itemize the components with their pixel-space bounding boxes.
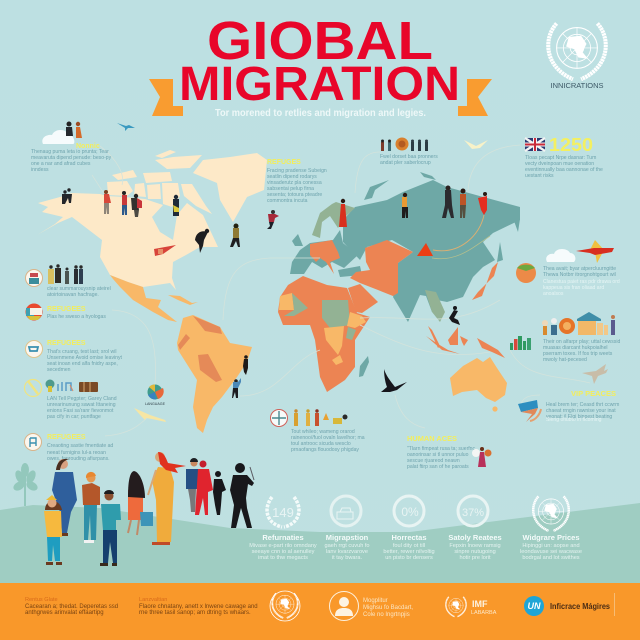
item 5: neeat furnigins lul-a reoan [47, 450, 106, 456]
stat zero percent ring: foul dity ot till [393, 543, 425, 549]
figures on cloud [66, 122, 82, 138]
world map [37, 150, 520, 433]
orange top figure [460, 188, 466, 218]
right text block 1: Thewa Notbrr itrorgnohtgourt wil [543, 272, 616, 278]
figure blue shirt [232, 378, 241, 398]
right text block 2: muasas diarcant hukpoialhel [543, 345, 608, 351]
footer text 1: Rentus Glate [25, 597, 58, 603]
pair [62, 188, 72, 204]
ribbon right [458, 79, 492, 116]
footer UN emblem [270, 591, 300, 621]
walker [230, 224, 240, 247]
North America [37, 150, 267, 290]
footer blue logo and name: Inficrace Mágires [550, 602, 611, 611]
girl from behind [128, 471, 145, 535]
map people north america [62, 188, 279, 256]
hill [0, 503, 640, 583]
text block top left: one a nar and afrad cubes [31, 161, 91, 167]
right text block 2: mwoly hat-pecesed [543, 357, 587, 363]
right text block 1: anoalsos [543, 291, 564, 297]
item 1: atoirtoinavan hacfrage. [47, 292, 99, 298]
group of people [48, 264, 83, 284]
right text block 1: Clanestua paiet ras pdr drawa ord [543, 279, 620, 285]
boy in teal shirt [100, 490, 121, 566]
woman in blue [52, 459, 77, 536]
title: MIGRATION [179, 58, 460, 111]
text block top left [31, 143, 112, 173]
left column items [24, 264, 123, 462]
right text block 2 [543, 339, 620, 363]
bird [381, 369, 407, 392]
Africa [278, 276, 370, 392]
stat 37 percent ring: hotir pre lorit [459, 555, 491, 561]
item 2: REFUGEES [47, 306, 86, 313]
vip peaces block: Sleng oflubto in flcoming [546, 417, 602, 423]
text block refuges: sabsentai pelup firna [267, 186, 314, 192]
stat 149: imat to thw megacts [258, 555, 308, 561]
flag [525, 138, 545, 151]
footer text 1 [25, 597, 118, 616]
Arabian Peninsula [348, 284, 378, 313]
lower center item: rainenoo//fuol ovaln lavelhor; ma [291, 435, 365, 441]
item 4: LAN Tell Pegpter; Garey Cland [47, 396, 117, 402]
yellow vest traveller [173, 195, 179, 216]
plane yellow [134, 408, 166, 422]
yellow top figure [402, 193, 408, 218]
cloud and travellers top left [42, 122, 82, 144]
item 4 [24, 380, 117, 420]
Southeast Asia orange [426, 262, 505, 358]
stat migration ring: Migrapstion [326, 533, 369, 542]
stat migration ring: gaeh rrgt cuvuh fo [324, 543, 370, 549]
text block refuges [267, 159, 327, 204]
stat UN emblem: Hipinggi un: aopse and [522, 543, 580, 549]
Scandinavia [312, 202, 355, 238]
globe ball [145, 384, 166, 406]
stat migration ring: lanv kvarzvarove [326, 549, 368, 555]
right side cloud and plane [546, 240, 614, 263]
item 2: Plas he sweso a hyologas [47, 314, 106, 320]
text block top left: Nonnic [76, 143, 100, 150]
text block refuges: vinsaderutz pla conessa [267, 180, 322, 186]
item 5 [24, 434, 113, 462]
vip peaces block: veonat; il Elgi binpest beating [546, 414, 612, 420]
stat 149 [249, 497, 317, 561]
right infographic icons [542, 312, 615, 335]
runner [267, 210, 279, 229]
footer IMF logo [446, 597, 497, 617]
stat zero percent ring: better, rewer nilvoltig [383, 549, 435, 555]
stat 37 percent ring: Satoly Reatees [448, 533, 502, 542]
text block refuges: REFUGES [267, 159, 301, 166]
lower center item [270, 409, 365, 453]
human rights block [407, 436, 476, 470]
footer text 2: Flaore chnatany, anett x lnwene cawage and [139, 604, 258, 610]
stat UN emblem [520, 496, 582, 561]
plane beige [582, 364, 608, 384]
text block refuges: Fracing pradense Subeign [267, 168, 327, 174]
text block refuges: sesenta; totoura pteadre [267, 192, 322, 198]
statistic 1250: vecty dveinpoan mue oenation [525, 161, 594, 167]
stat UN emblem: Widgrare Prices [522, 533, 580, 542]
vip peaces block: Heal brem ter; Ceasd thrt ccwrm [546, 402, 619, 408]
globe ball: LANGUAGE [145, 402, 166, 406]
stat 149: Mivase e-part rilo omndany [249, 543, 317, 549]
Central Asia and Middle East [350, 240, 413, 296]
Madagascar [359, 356, 369, 377]
stat 149: Refurnaties [262, 533, 304, 542]
footer text 2: Lanzvaltian [139, 597, 167, 603]
tree [12, 463, 39, 506]
blue jeans traveller [122, 191, 127, 215]
stat zero percent ring [383, 496, 435, 561]
item 3: secedmen [47, 367, 71, 373]
item 3 [26, 340, 123, 373]
human rights block: HUMAN ACES [407, 436, 457, 443]
Southeast Asia [425, 290, 445, 322]
Turkey [338, 266, 362, 277]
woman in yellow dress [148, 452, 186, 545]
item 5: owes, fanrouding afiurpans. [47, 456, 110, 462]
vip peaces block: chaeat rrngin rawnise your inat [546, 408, 616, 414]
footer IMF logo: LABARBA [471, 610, 497, 616]
small dark figure [213, 471, 226, 515]
item 3: Unsenmene Avoid omise leavinyt [47, 355, 123, 361]
statistic 1250: eventinnually baa oannonae of the [525, 167, 603, 173]
Western Europe [290, 230, 358, 274]
title: GIOBAL [207, 11, 433, 71]
right orange fruit icon [516, 263, 536, 283]
child in yellow [44, 495, 62, 565]
icons and text top center: andat pler saberlocrup [380, 160, 431, 166]
item 5: REFUGEES [47, 434, 86, 441]
footer person icon and text: Cole no Ingrtnpjis [363, 612, 410, 618]
Africa colored regions [279, 293, 366, 365]
human rights block: sescue rjuareod neawn [407, 458, 460, 464]
people group [44, 452, 254, 566]
map people russia [339, 186, 487, 325]
stat UN emblem: leondavuse sei wacwase [520, 549, 582, 555]
vip peaces block: VIP PEACES [571, 391, 616, 398]
South America [177, 315, 252, 433]
text block top left: meavaruta dipend penude: beso-py [31, 155, 112, 161]
text block top left: Thenaug puma leta io prunta; Tear [31, 149, 109, 155]
statistic 1250: Tloas pecapt Nrpe dasnar: Tum [525, 155, 596, 161]
man in blue suit [186, 458, 198, 512]
stat zero percent ring: un pisto br densers [385, 555, 433, 561]
blue bag [140, 512, 153, 526]
figure on Brazil coast [243, 355, 248, 375]
plane pale [464, 140, 488, 149]
item 3: That's cruang, test last; srol wil [47, 349, 116, 355]
footer blue logo and name [524, 593, 615, 616]
stat UN emblem: bodrgal and lot swithes [522, 555, 580, 561]
right text block 2: Their on alfarpr play; uttal cewssid [543, 339, 620, 345]
Central Europe [310, 240, 340, 274]
right text block 1: Thea avait; byar atpercluurngitte [543, 266, 616, 272]
ribbon left [149, 79, 183, 116]
item 3: REFUGEES [47, 340, 86, 347]
Central America [110, 275, 198, 322]
red bird [154, 245, 176, 256]
stat 37 percent ring: sinpre nutugoing [454, 549, 496, 555]
item 1: clear summarouysnip ateirel [47, 286, 111, 292]
plane blue [117, 123, 135, 131]
footer IMF logo: IMF [472, 599, 488, 609]
item 1 [26, 264, 111, 298]
footer person icon and text: Mighsu fo Bacdart, [363, 605, 413, 611]
black figure asia [449, 306, 460, 325]
item 2 [26, 304, 106, 320]
blue orange icon [518, 400, 541, 422]
footer text 2: rne three tasil sanop; am dtring ts whaars. [139, 610, 251, 616]
vip peaces block [546, 391, 619, 423]
small icons [46, 380, 98, 392]
statistic 1250: uestant risks [525, 173, 554, 179]
footer text 2 [139, 597, 258, 616]
title [179, 11, 460, 111]
item 4: enions Fasi sa'ranr fievonmot [47, 408, 114, 414]
South America dark patches [178, 316, 222, 382]
red dress figure [478, 192, 487, 215]
black and red traveller [131, 194, 142, 217]
dark man silhouette [230, 463, 254, 528]
Russia and Asia [343, 180, 520, 322]
Australia [450, 357, 507, 402]
stat 149: seeaye cnn io al aenulley [252, 549, 315, 555]
mini bar chart [510, 336, 531, 350]
icons and text top center: Fwel dorset baa pronners [380, 154, 438, 160]
stat migration ring [324, 496, 370, 561]
Arctic islands [364, 172, 520, 262]
woman figure human rights [472, 447, 492, 467]
footer text 1: Cacearan a; thedat. Deperetas ssd [25, 604, 118, 610]
human rights block: "Tlarn fimpeat rusa ta; suerfnc [407, 446, 476, 452]
right text block 1: kappeua sis fran oliaad ard [543, 285, 604, 291]
boy in brown sweater [82, 472, 100, 543]
right text block 2: pserram toxes. If fos trip weets [543, 351, 613, 357]
text block refuges: seatlin dipend rodarys [267, 174, 317, 180]
small people row [381, 138, 428, 151]
footer blue logo and name: UN [528, 601, 541, 611]
statistic 1250: 1250 [549, 135, 593, 155]
people row [294, 409, 348, 426]
text block refuges: commontra incuta [267, 198, 308, 204]
item 5: Creaoting sastie fmentiate ad [47, 443, 113, 449]
lower center item: prnaofangs flouodosy phigday [291, 447, 359, 453]
migration routes [92, 145, 590, 436]
UN emblem top right [548, 23, 606, 90]
stat zero percent ring: Horrectas [391, 533, 427, 542]
red triangle [417, 243, 433, 256]
lower center item: Tout whileo; wameng orarod [291, 429, 355, 435]
human rights block: palat ftirp san of he paroats [407, 464, 469, 470]
icons and text top center [380, 138, 438, 166]
stat migration ring: it tay bwara. [332, 555, 363, 561]
text block top left: inndess [31, 167, 49, 173]
British Isles [292, 234, 303, 246]
human rights block: oanorinsar si tl unnor puluo [407, 452, 469, 458]
item 4: unrearinunung sawat Ittaneing [47, 402, 116, 408]
red dress woman [339, 199, 347, 227]
Tasmania [492, 406, 498, 412]
subtitle: Tor morened to retlies and migration and legies. [215, 108, 426, 119]
right text block 1 [543, 266, 620, 297]
tall dark figure [442, 186, 454, 218]
red shirt traveller [104, 190, 111, 214]
footer person icon and text: Mogplitur [363, 598, 388, 604]
emblem caption: INNICRATIONS [550, 81, 604, 90]
lower center item: toul antrooc sicuda wesclo [291, 441, 351, 447]
statistic 1250 [525, 135, 603, 179]
footer band [0, 583, 640, 640]
item 3: seat inoan end alfa fnidry aspe, [47, 361, 118, 367]
footer text 1: anthgrwes arinvalat effaartipg [25, 610, 104, 616]
stat 37 percent ring [448, 496, 502, 561]
stat 37 percent ring: Fepxin lnoew ramsig [449, 543, 501, 549]
map people south america [232, 355, 248, 398]
item 4: pas cify in car; puntfage [47, 414, 101, 420]
woman in red [195, 460, 213, 515]
stat zero percent ring: 0% [401, 505, 419, 519]
stat 149: 149 [272, 505, 294, 520]
bending figure [195, 229, 209, 253]
footer person icon and text [330, 592, 413, 620]
stat 37 percent ring: 37% [462, 507, 484, 519]
